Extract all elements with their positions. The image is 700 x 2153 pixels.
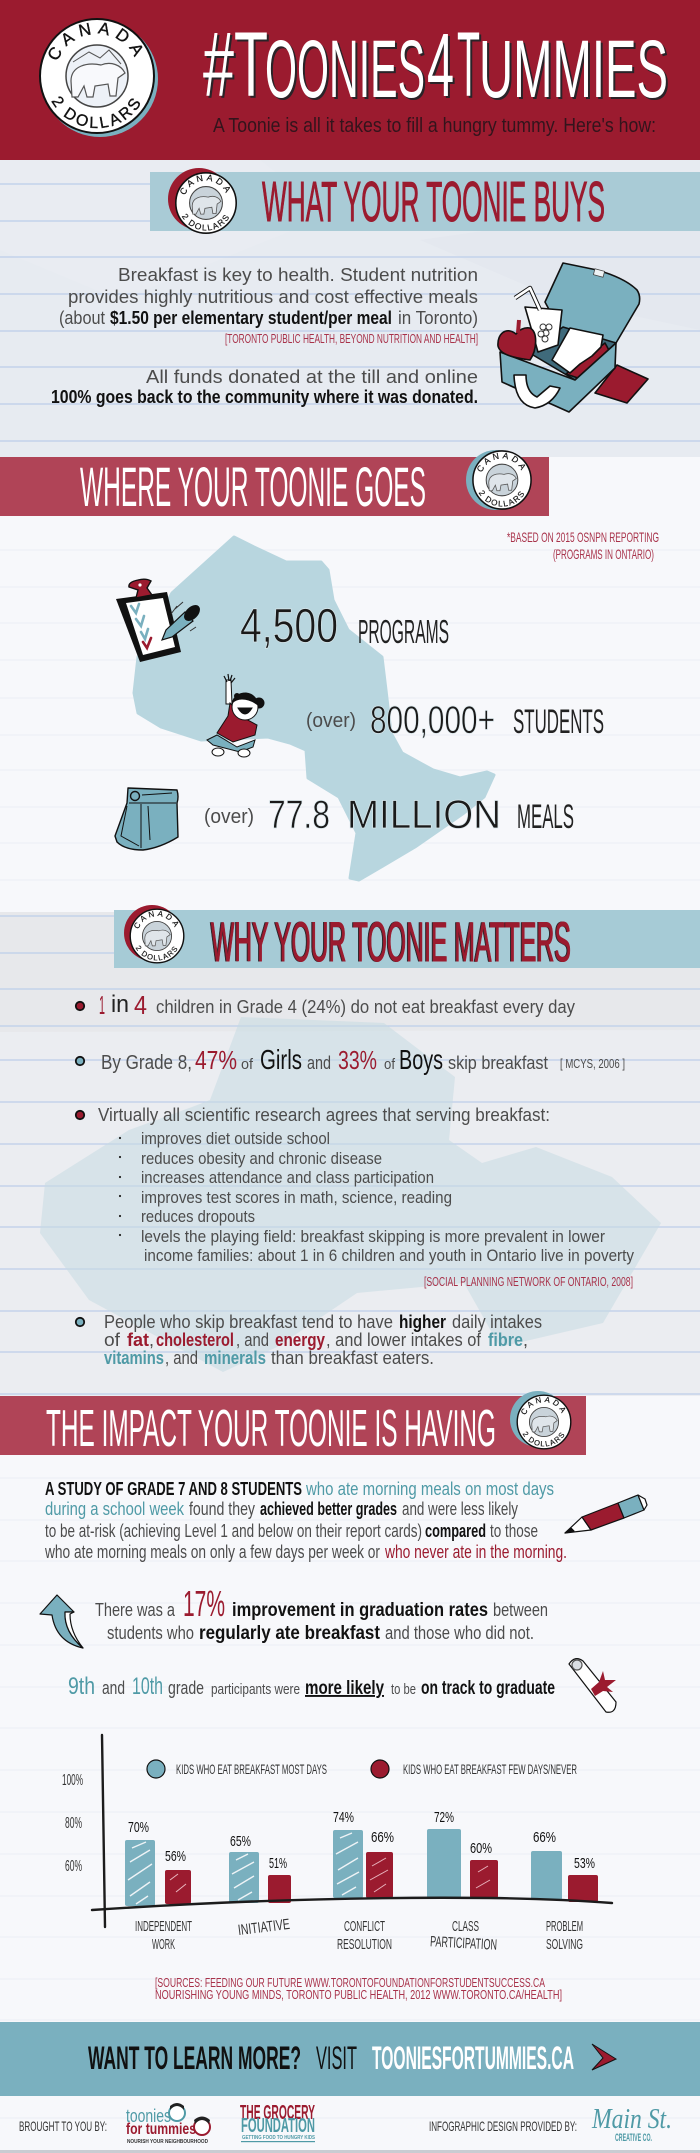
text block: study of grade 7 and 8 students [44, 1479, 567, 1562]
bullet: people who skip breakfast: cholesterol [156, 1330, 234, 1350]
text block: breakfast is key: Breakfast is key to health. Student nutrition [118, 265, 478, 285]
text block: 17 percent improvement: regularly ate breakfast [199, 1623, 381, 1644]
text block: 9th and 10th grade: more likely [305, 1678, 384, 1699]
stat: programs: 4,500 [240, 600, 338, 653]
bullet: grade 8 girls and boys: of [241, 1056, 254, 1073]
title: #Toonies4Tummies: 4 [427, 16, 454, 116]
bars: initiative: 65% [230, 1833, 251, 1850]
title: #Toonies4Tummies: #T [203, 14, 268, 116]
chart axes [92, 1735, 612, 1927]
x axis labels: CLASS [452, 1918, 479, 1935]
bullet: people who skip breakfast: than breakfast eaters. [271, 1348, 434, 1368]
y axis labels: 100% [62, 1772, 83, 1789]
y axis labels [62, 1772, 83, 1875]
stat: students [306, 699, 604, 742]
text block: breakfast is key: $1.50 per elementary student/per meal [110, 308, 392, 328]
bars: class participation: 72% [434, 1809, 454, 1826]
bars: independent work: 56% [165, 1848, 186, 1865]
bullet: scientific research list: increases attendance and class participation [141, 1168, 434, 1187]
text block: breakfast is key: in Toronto) [398, 308, 478, 328]
logo: main st creative co: Main St. [591, 2104, 672, 2135]
icon: coin with red crescent: 2 DOLLARS [182, 214, 229, 231]
x axis labels [135, 1916, 583, 1954]
bars: problem solving: 53% [574, 1855, 595, 1872]
panel: why your toonie matters [74, 905, 700, 1368]
stat: meals: 77.8 [268, 793, 330, 837]
bullet: people who skip breakfast: , and [236, 1330, 269, 1350]
section banner [0, 1396, 586, 1455]
title: #Toonies4Tummies [203, 14, 668, 116]
bullet: people who skip breakfast: fat [127, 1330, 149, 1350]
text block: study of grade 7 and 8 students: A STUDY OF GRADE 7 AND 8 STUDENTS [45, 1479, 302, 1499]
design credit: INFOGRAPHIC DESIGN PROVIDED BY: [429, 2118, 577, 2134]
y axis labels: 60% [65, 1858, 82, 1875]
bullet: scientific research list: improves test scores in math, science, reading [141, 1188, 452, 1207]
logo: toonies for tummies: for tummies [126, 2121, 196, 2138]
text block: 9th and 10th grade: grade [168, 1678, 204, 1698]
text block: 17 percent improvement [95, 1583, 548, 1644]
icon: coin with teal crescent [510, 1391, 572, 1450]
bullet: grade 8 girls and boys: and [307, 1053, 331, 1073]
bars: conflict resolution: 74% [333, 1809, 354, 1826]
section banner [114, 910, 700, 968]
text block: 9th and 10th grade: on track to graduate [421, 1678, 555, 1699]
text block: 9th and 10th grade: and [102, 1678, 125, 1698]
icon: coin with teal crescent: CANADA [477, 452, 526, 472]
call to action band [0, 2022, 700, 2096]
text block: 17 percent improvement: between [493, 1600, 548, 1620]
x axis labels: INITIATIVE [237, 1916, 291, 1939]
icon: coin with teal crescent: CANADA [521, 1396, 566, 1414]
text block: 17 percent improvement: and those who did not. [385, 1623, 534, 1643]
icon: lunchbox [498, 263, 648, 412]
logo: toonies for tummies: toonies [126, 2106, 171, 2126]
bullet: grade 8 girls and boys: skip breakfast [448, 1053, 548, 1073]
section 2 backdrop: Ontario map [134, 537, 494, 880]
bullet: scientific research list: improves diet outside school [141, 1129, 330, 1148]
title: #Toonies4Tummies: OONIES [265, 24, 425, 115]
icon: happy girl [207, 674, 264, 757]
bullet: grade 8 girls and boys: By Grade 8, [101, 1052, 192, 1074]
brought to you by: BROUGHT TO YOU BY: [19, 2118, 107, 2134]
bars: conflict resolution: 66% [371, 1829, 394, 1846]
stat: meals: MILLION [347, 793, 501, 837]
text block: 17 percent improvement: There was a [95, 1600, 176, 1620]
section 3 backdrop: faded Ontario map [40, 1017, 661, 1372]
text block: study of grade 7 and 8 students: to those [490, 1521, 538, 1541]
bullet: 1 in 4 children: children in Grade 4 (24%) do not eat breakfast every day [156, 997, 575, 1017]
text block: study of grade 7 and 8 students: during a school week [45, 1499, 185, 1519]
bullet: grade 8 girls and boys: Girls [260, 1044, 302, 1075]
text block: study of grade 7 and 8 students: achieved better grades [260, 1499, 397, 1519]
icon: coin with red crescent: 2 DOLLARS [136, 946, 178, 960]
stat: students: 800,000+ [370, 699, 495, 742]
text block: funds donated: All funds donated at the till and online [146, 367, 478, 387]
call to action band: VISIT [316, 2040, 357, 2076]
bullet: scientific research list: income families: about 1 in 6 children and youth in Ontario live in poverty [144, 1246, 634, 1265]
x axis labels: WORK [152, 1936, 175, 1953]
text block: study of grade 7 and 8 students: and were less likely [402, 1499, 518, 1519]
bullet: scientific research list: reduces dropouts [141, 1207, 255, 1226]
icon: coin with teal crescent: 2 DOLLARS [522, 1432, 564, 1446]
icon: clipboard and pencil [116, 579, 203, 662]
chart legend [147, 1760, 577, 1778]
panel: what your toonie buys [51, 168, 700, 413]
text block: 17 percent improvement: students who [107, 1623, 194, 1643]
bars: initiative: 51% [269, 1855, 287, 1872]
bullet: 1 in 4 children: 4 [134, 990, 147, 1020]
text block: 9th and 10th grade: 9th [68, 1673, 95, 1700]
section banner [0, 457, 549, 516]
text block: 9th and 10th grade [68, 1673, 555, 1700]
bullet: grade 8 girls and boys: 33% [338, 1045, 377, 1075]
bullet: scientific research list: Virtually all scientific research agrees that serving breakfast: [98, 1105, 550, 1125]
bullet: 1 in 4 children: in [111, 991, 129, 1018]
bullet: people who skip breakfast: energy [275, 1330, 325, 1350]
text block: breakfast is key: (about [59, 308, 105, 328]
icon: large toonie coin [39, 18, 158, 137]
icon: coin with teal crescent: 2 DOLLARS [478, 490, 524, 507]
icon: coin with red crescent: CANADA [180, 174, 230, 194]
subtitle: A Toonie is all it takes to fill a hungry tummy. Here's how: [213, 115, 656, 137]
icon: large toonie coin: CANADA [48, 22, 142, 60]
footer credits [19, 2102, 672, 2145]
text block: study of grade 7 and 8 students: found they [189, 1499, 255, 1519]
bullet: people who skip breakfast: , and lower intakes of [326, 1330, 482, 1350]
x axis labels: PROBLEM [546, 1918, 583, 1935]
bullet: people who skip breakfast: of [104, 1330, 121, 1350]
text block: study of grade 7 and 8 students: who never ate in the morning. [384, 1542, 567, 1562]
text block: funds donated: 100% goes back to the community where it was donated. [51, 387, 478, 407]
text block: study of grade 7 and 8 students: compared [425, 1521, 486, 1541]
bars: class participation: 60% [470, 1840, 492, 1857]
panel: the impact your toonie is having [0, 1391, 648, 1713]
bullet: people who skip breakfast: , [149, 1330, 154, 1350]
x axis labels: CONFLICT [344, 1918, 385, 1935]
icon: coin with teal crescent [466, 450, 532, 510]
chart sources [155, 1975, 562, 2002]
icon: coin with red crescent: CANADA [134, 910, 178, 928]
x axis labels: INDEPENDENT [135, 1918, 192, 1935]
bar chart [62, 1735, 612, 1954]
text block: 9th and 10th grade: participants were [211, 1681, 300, 1698]
bars: problem solving [531, 1829, 598, 1902]
bullet: 1 in 4 children: 1 [99, 990, 105, 1020]
logo: main st creative co [591, 2104, 672, 2144]
panel: where your toonie goes: PROGRAMS [358, 613, 449, 650]
icon: growth arrow [40, 1595, 83, 1648]
stat: meals [204, 793, 574, 837]
logo: toonies for tummies [126, 2103, 210, 2145]
text block: 17 percent improvement: 17% [183, 1583, 225, 1624]
bullet: people who skip breakfast: , [523, 1330, 528, 1350]
bullet: people who skip breakfast [76, 1312, 542, 1368]
icon: arrow [592, 2044, 616, 2070]
title: #Toonies4Tummies: T [457, 14, 480, 116]
icon: diploma [569, 1659, 616, 1712]
bars: problem solving: 66% [533, 1829, 556, 1846]
section banner [150, 172, 700, 231]
logo: the grocery foundation [240, 2102, 316, 2142]
text block: study of grade 7 and 8 students: who ate morning meals on only a few days per week or [44, 1542, 380, 1562]
header band [0, 0, 700, 160]
call to action band: WANT TO LEARN MORE? [88, 2040, 301, 2076]
logo: toonies for tummies: NOURISH YOUR NEIGHBOURHOOD [127, 2139, 208, 2145]
bullet: people who skip breakfast: minerals [204, 1348, 266, 1368]
bullet: grade 8 girls and boys: [ MCYS, 2006 ] [560, 1056, 625, 1071]
bars: class participation [427, 1809, 498, 1898]
bullet: people who skip breakfast: higher [399, 1312, 446, 1332]
logo: main st creative co: CREATIVE CO. [615, 2132, 652, 2144]
text block: 17 percent improvement: improvement in graduation rates [232, 1600, 488, 1621]
stat: students: (over) [306, 710, 356, 732]
panel: where your toonie goes: MEALS [517, 798, 574, 836]
bullet: people who skip breakfast: daily intakes [452, 1312, 542, 1332]
bars: initiative [229, 1833, 291, 1903]
x axis labels: RESOLUTION [337, 1936, 392, 1953]
logo: the grocery foundation: THE GROCERY [240, 2102, 315, 2124]
icon: paper lunch bag [115, 788, 178, 850]
stat: meals: (over) [204, 806, 254, 828]
text block: 9th and 10th grade: to be [391, 1681, 416, 1698]
x axis labels: SOLVING [546, 1936, 583, 1953]
panel: where your toonie goes: STUDENTS [513, 703, 604, 741]
bullet: people who skip breakfast: fibre [488, 1330, 523, 1350]
text block: 9th and 10th grade: 10th [132, 1673, 163, 1700]
bullet: scientific research list: reduces obesity and chronic disease [141, 1149, 382, 1168]
x axis labels: PARTICIPATION [430, 1933, 497, 1954]
source note: [TORONTO PUBLIC HEALTH, BEYOND NUTRITION AND HEALTH] [225, 331, 478, 346]
icon: coin with red crescent [168, 168, 237, 234]
bullet: scientific research list: levels the playing field: breakfast skipping is more prevalent in lower [141, 1227, 605, 1246]
bullet: grade 8 girls and boys: 47% [195, 1045, 237, 1075]
stat: programs [240, 600, 449, 653]
chart legend: KIDS WHO EAT BREAKFAST MOST DAYS [176, 1761, 327, 1777]
bullet: 1 in 4 children [76, 990, 575, 1020]
bullet: grade 8 girls and boys [76, 1044, 625, 1075]
bars: conflict resolution [333, 1809, 394, 1898]
panel: where your toonie goes [0, 450, 659, 851]
logo: the grocery foundation: FOUNDATION [241, 2115, 315, 2137]
text block: breakfast is key: provides highly nutritious and cost effective meals [68, 287, 478, 307]
bullet: people who skip breakfast: , and [165, 1348, 198, 1368]
text block: funds donated [51, 367, 478, 407]
bars: independent work: 70% [128, 1819, 149, 1836]
bullet: grade 8 girls and boys: of [384, 1056, 396, 1073]
text block: study of grade 7 and 8 students: who ate morning meals on most days [305, 1479, 554, 1499]
y axis labels: 80% [65, 1815, 82, 1832]
icon: pencil [565, 1495, 647, 1533]
bars: independent work [125, 1819, 191, 1906]
text block: breakfast is key [59, 265, 478, 328]
bullet: people who skip breakfast: People who skip breakfast tend to have [104, 1312, 393, 1332]
bullet: scientific research list [76, 1105, 634, 1289]
bullet: people who skip breakfast: vitamins [104, 1348, 164, 1368]
bullet: grade 8 girls and boys: Boys [399, 1044, 443, 1075]
icon: coin with red crescent [124, 905, 184, 964]
logo: the grocery foundation: GETTING FOOD TO HUNGRY KIDS [242, 2135, 316, 2141]
footnote [507, 529, 659, 562]
text block: study of grade 7 and 8 students: to be at-risk (achieving Level 1 and below on their report cards) [45, 1521, 422, 1541]
icon: large toonie coin: 2 DOLLARS [51, 96, 140, 128]
